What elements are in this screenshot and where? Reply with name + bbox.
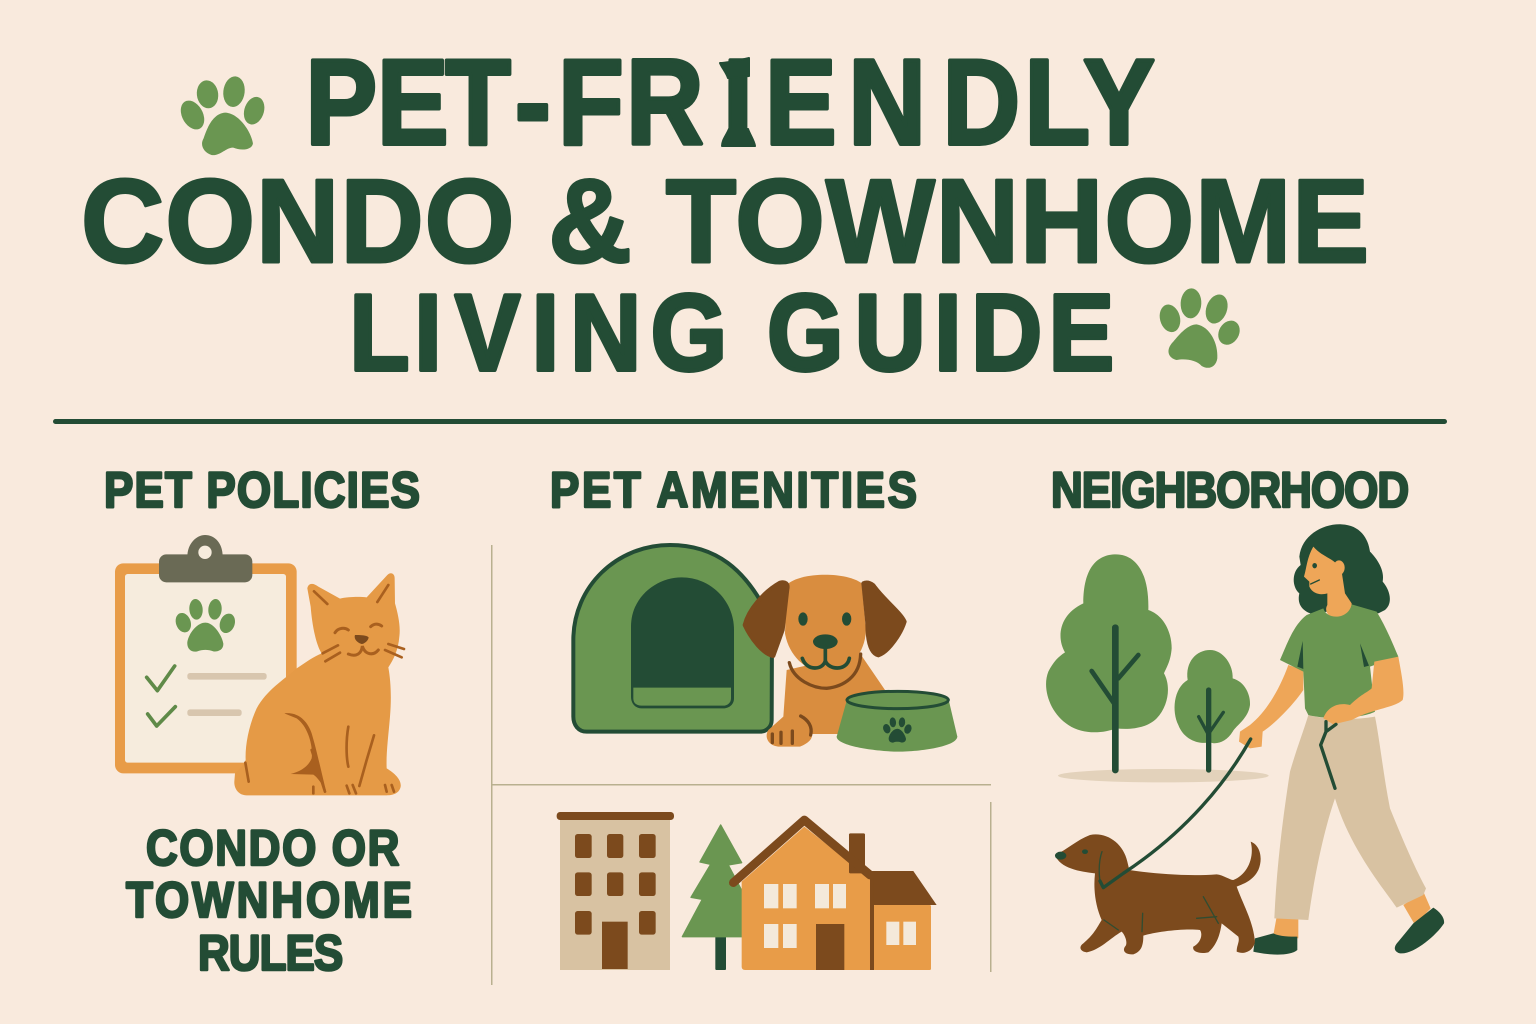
heading: condo or townhome rules: CONDO OR	[146, 819, 399, 876]
title: PET-FRIENDLY	[305, 35, 1155, 171]
puppy	[745, 575, 905, 747]
icon: condo, tree and townhome	[557, 812, 937, 970]
heading: neighborhood: NEIGHBORHOOD	[1051, 461, 1409, 518]
pine tree	[682, 825, 748, 970]
townhome	[733, 820, 937, 970]
title	[81, 35, 1369, 393]
heading: condo or townhome rules	[126, 819, 412, 981]
bowl	[837, 691, 957, 752]
heading: condo or townhome rules: TOWNHOME	[126, 871, 412, 928]
dachshund	[1055, 834, 1261, 954]
title: LIVING GUIDE	[350, 271, 1114, 393]
woman	[1239, 524, 1444, 955]
icon: trees, woman walking dachshund	[1046, 524, 1444, 955]
heading: condo or townhome rules: RULES	[198, 924, 343, 981]
kennel	[573, 545, 772, 732]
icon: paw top left	[176, 76, 267, 155]
trees	[1046, 554, 1269, 782]
icon: kennel, dog and bowl	[573, 545, 957, 752]
heading: pet amenities: PET AMENITIES	[550, 461, 917, 518]
title: CONDO & TOWNHOME	[81, 154, 1369, 287]
leash	[1100, 722, 1336, 888]
cat	[234, 573, 404, 795]
icon: paw top right	[1157, 288, 1244, 368]
icon: clipboard with cat	[115, 535, 404, 795]
condo building	[557, 812, 674, 970]
clipboard	[115, 535, 297, 773]
heading: pet policies: PET POLICIES	[104, 461, 420, 518]
